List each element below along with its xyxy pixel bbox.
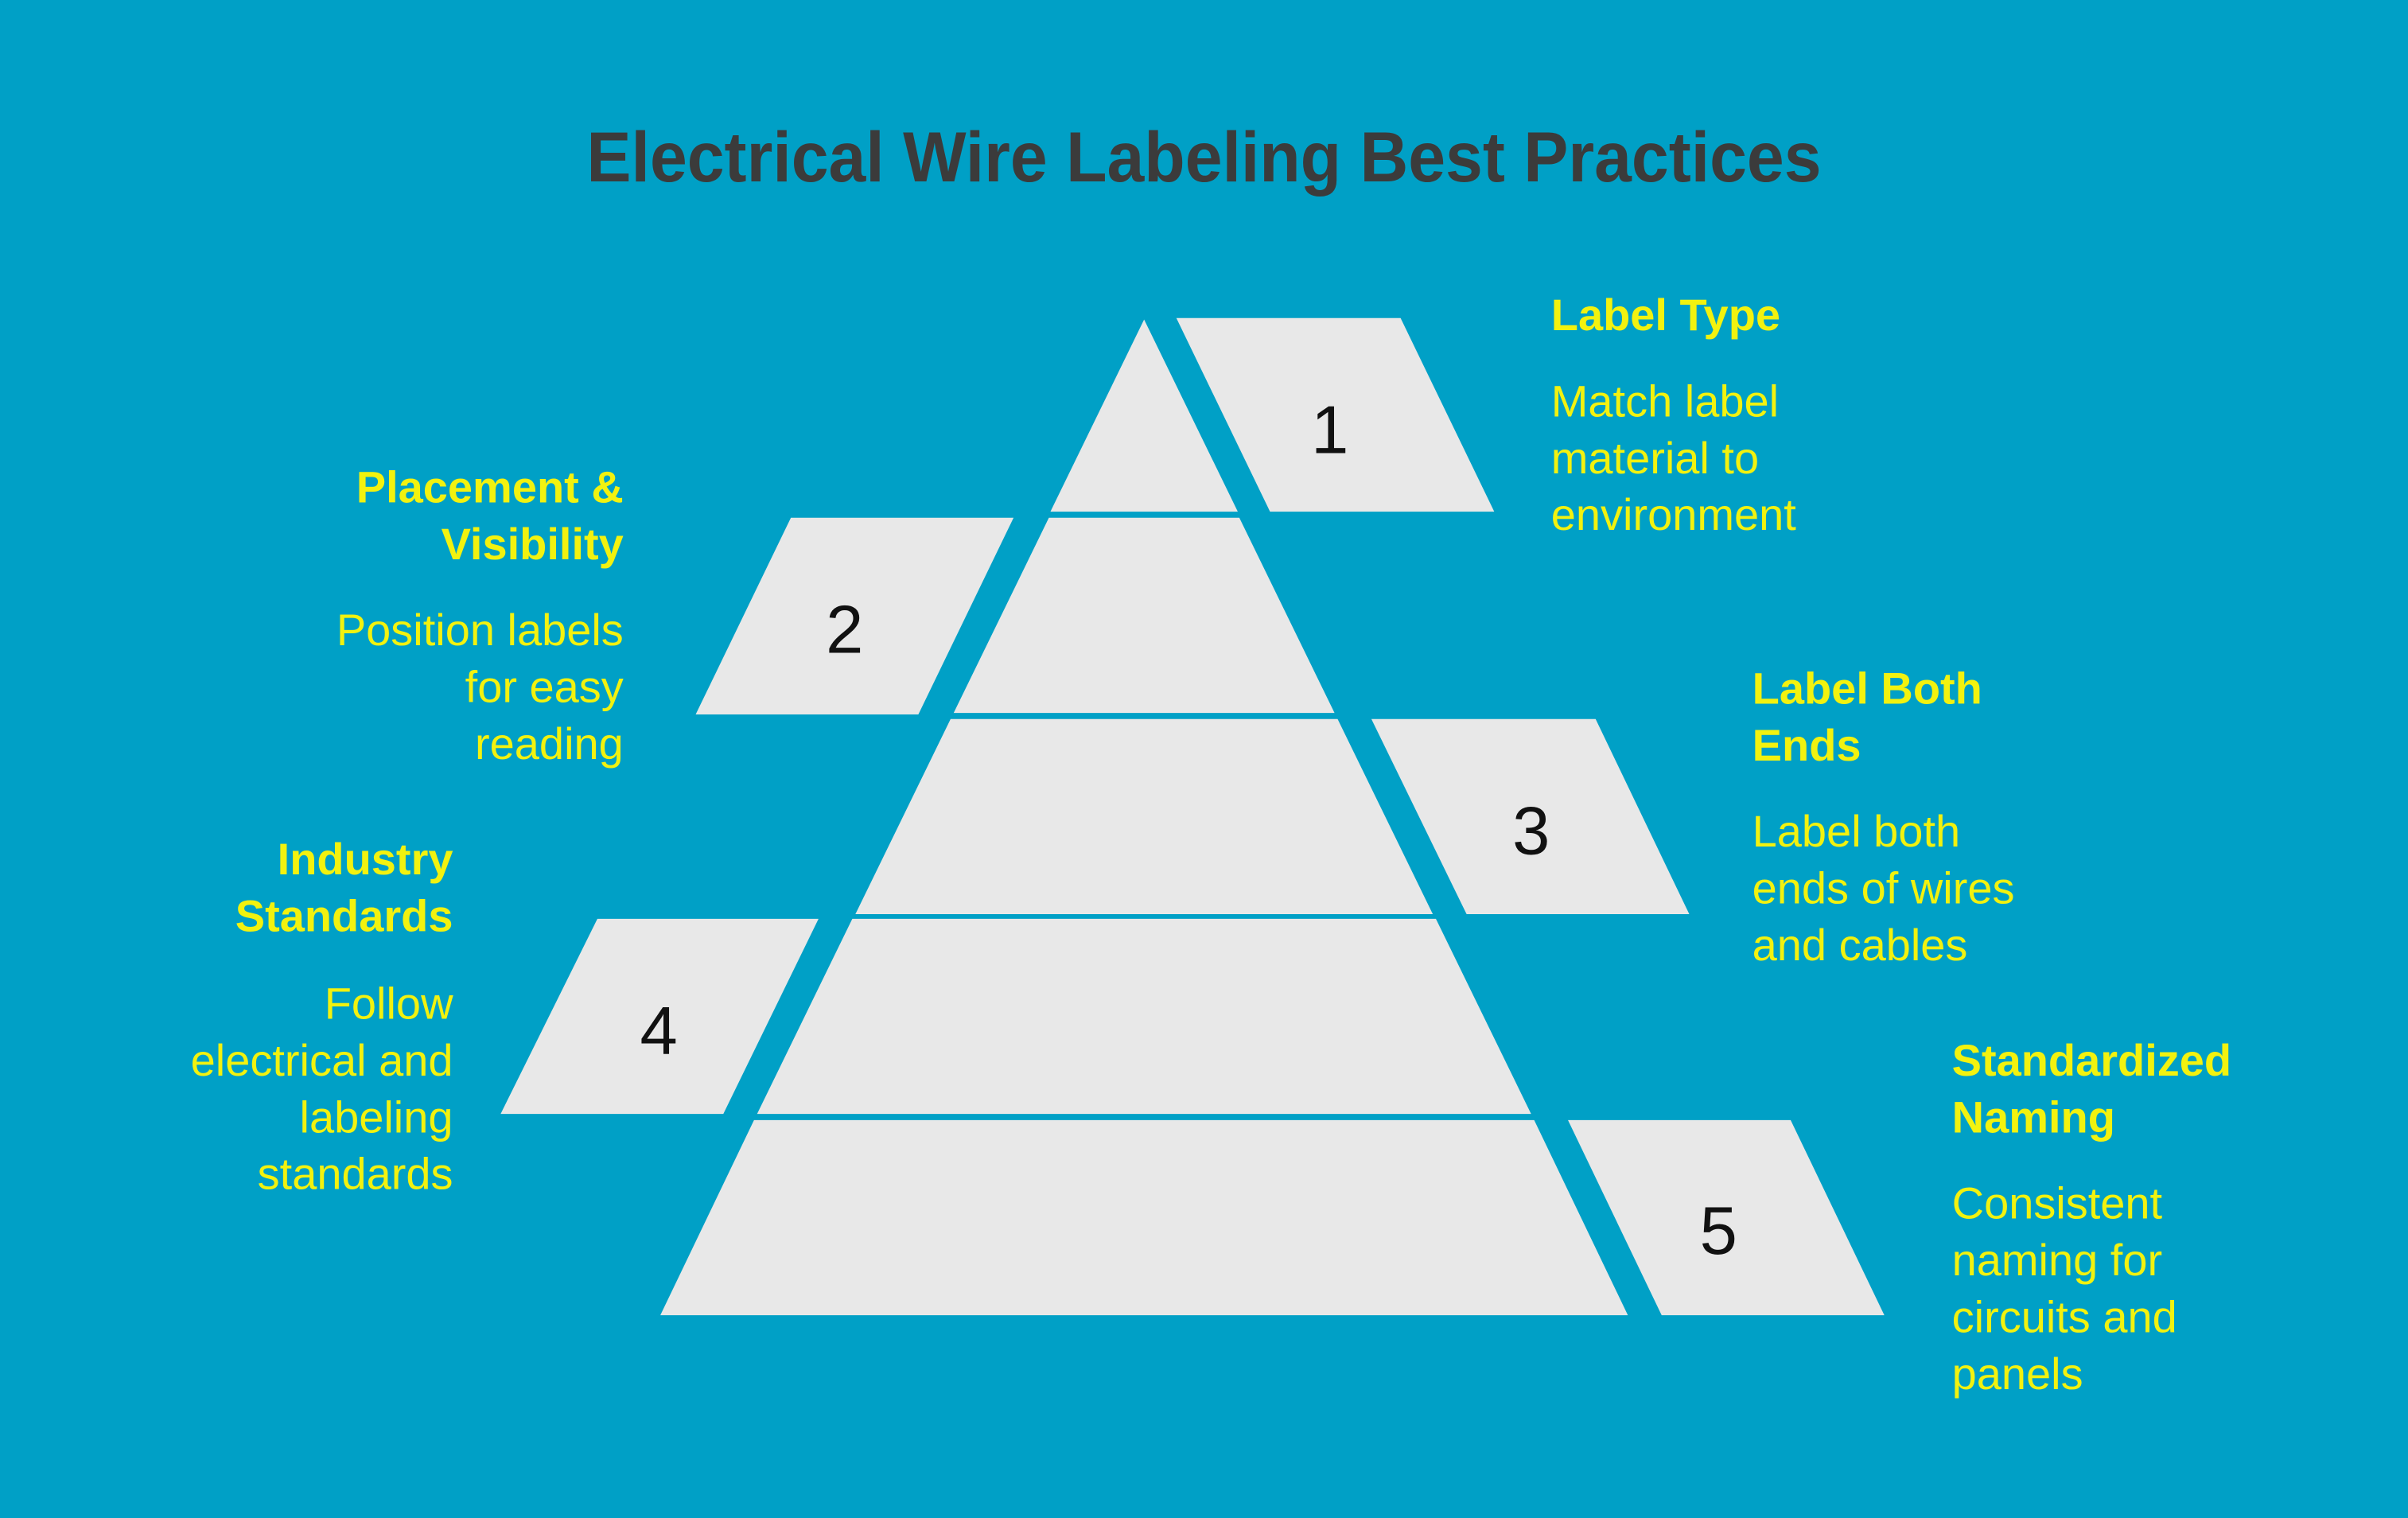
level 1: Match label (1551, 376, 1779, 426)
level 5: Naming (1952, 1092, 2115, 1142)
level 2 (336, 461, 1013, 769)
title: Electrical Wire Labeling Best Practices (586, 118, 1822, 197)
level 4: Standards (235, 890, 453, 940)
level 1: environment (1551, 489, 1796, 539)
level 3 (1371, 663, 2014, 970)
level 4: Follow (325, 978, 453, 1028)
level 5: naming for (1952, 1235, 2162, 1285)
level 3: Label Both (1753, 663, 1982, 713)
level 3: ends of wires (1753, 863, 2014, 913)
pyramid (660, 320, 1628, 1315)
level 1: Label Type (1551, 290, 1780, 340)
level 5: Standardized (1952, 1035, 2231, 1085)
level 2: Position labels (336, 605, 624, 655)
level 4: standards (258, 1149, 453, 1199)
level 2: Visibility (442, 519, 624, 569)
level 4 (191, 834, 819, 1199)
level 2: for easy (465, 662, 624, 712)
level 3: Ends (1753, 720, 1861, 770)
level 4: electrical and (191, 1035, 453, 1085)
level 2: reading (475, 718, 624, 769)
level 5: panels (1952, 1349, 2083, 1399)
level 5 (1568, 1035, 2231, 1399)
level 3: and cables (1753, 920, 1967, 970)
level 4: labeling (300, 1092, 453, 1142)
level 1 (1177, 290, 1796, 539)
level 5: 5 (1700, 1193, 1737, 1269)
level 1: 1 (1311, 393, 1348, 469)
level 2: Placement & (356, 461, 624, 512)
level 2: 2 (826, 593, 863, 668)
level 5: Consistent (1952, 1177, 2163, 1228)
level 4: Industry (278, 834, 453, 884)
level 3: Label both (1753, 806, 1960, 856)
level 5: circuits and (1952, 1291, 2177, 1341)
level 3: 3 (1512, 794, 1550, 870)
level 4: 4 (640, 994, 678, 1069)
level 1: material to (1551, 433, 1759, 483)
